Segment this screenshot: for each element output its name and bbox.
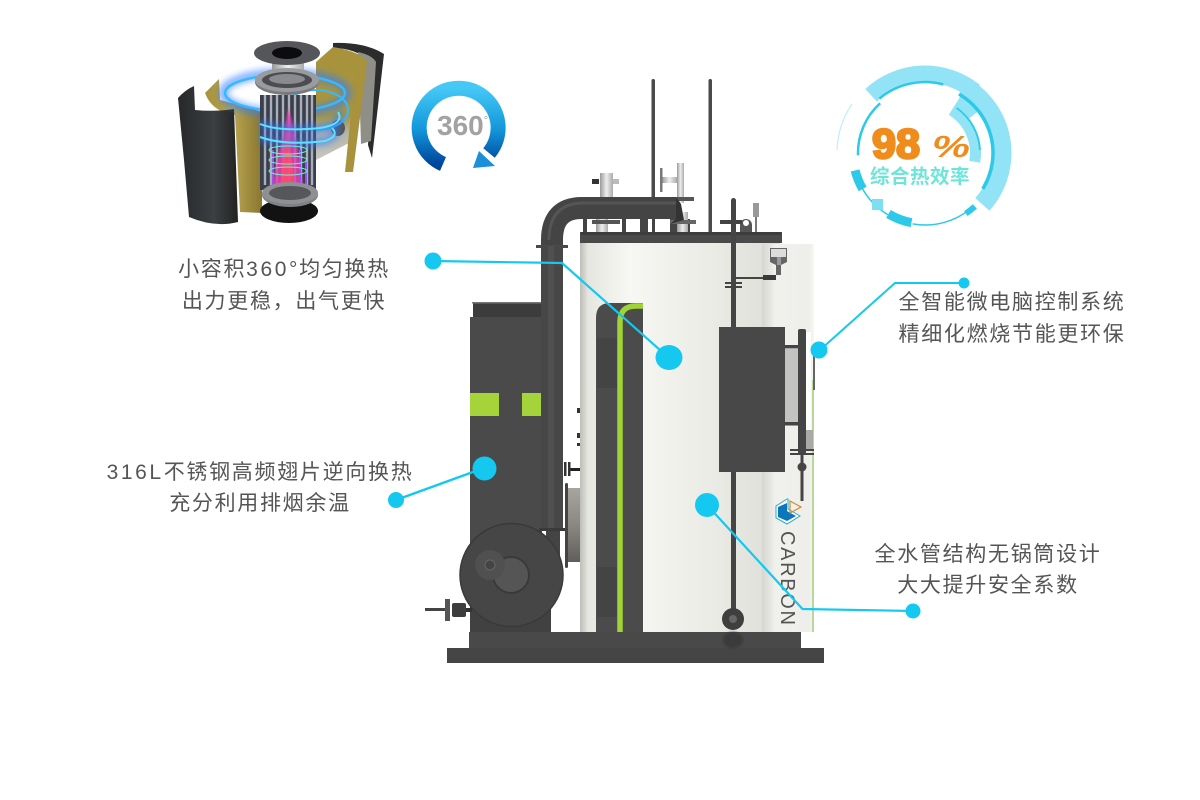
shell hole: [331, 120, 345, 136]
percent sign: %: [932, 129, 970, 164]
vertical flue pipe: [539, 246, 566, 557]
exchanger tube bundle: [260, 95, 316, 190]
text: smart control system: 精细化燃烧节能更环保: [898, 323, 1126, 346]
ring graphics: [813, 41, 1037, 265]
callout 1: [424, 252, 682, 370]
callout lines and dots: [388, 252, 970, 618]
bottom base and ring: [260, 182, 318, 223]
text: 360 heat exchange: 小容积360°均匀换热: [178, 258, 390, 281]
side panel with green stripe: [596, 303, 643, 632]
text: smart control system: 全智能微电脑控制系统: [898, 291, 1126, 314]
top flange and upper ring: [254, 41, 320, 95]
stack: economizer chimney: [470, 302, 542, 632]
back blue swirl ring: [223, 73, 348, 130]
callout 4: [695, 493, 920, 618]
heat exchanger illustration: [178, 41, 384, 224]
right gold shell: [316, 47, 367, 172]
logo: Carbon hexagon: [776, 499, 801, 524]
front blue swirl lines: [260, 112, 340, 175]
right gold shell edge: [345, 56, 367, 172]
control box: [719, 327, 815, 501]
burner: [425, 524, 563, 632]
text: 360 heat exchange: 出力更稳，出气更快: [182, 290, 386, 313]
flame: [272, 108, 306, 187]
boiler illustration: [425, 79, 824, 663]
logo wordmark: CARBON: CARBON: [776, 531, 798, 625]
value: 98: 98: [872, 120, 920, 167]
pipes and rods on top of the boiler: [536, 79, 759, 300]
back shell inner grey strip: [358, 52, 376, 144]
text: 360 heat exchange: [178, 258, 390, 313]
left gold shell: [205, 79, 262, 213]
callout 2: [810, 278, 970, 358]
text: smart control system: [898, 291, 1126, 346]
text: 316L stainless steel fins: 316L不锈钢高频翅片逆向换热: [107, 461, 413, 484]
left black shell: [178, 86, 238, 224]
text: 316L stainless steel fins: 充分利用排烟余温: [169, 492, 351, 515]
icon: 360 degree arrow: [419, 88, 498, 168]
base frame: [447, 632, 824, 663]
burner mount: [564, 408, 588, 568]
water-level piping and flange: [722, 198, 787, 630]
text: full water tube structure: [874, 543, 1102, 597]
caption: 综合热效率: [870, 165, 970, 188]
back right shell: [333, 43, 384, 158]
icon: 360 degree arrow: °: [484, 115, 488, 127]
text: full water tube structure: 大大提升安全系数: [897, 574, 1079, 597]
icon: 360 degree arrow: 360: [437, 110, 484, 141]
text: full water tube structure: 全水管结构无锅筒设计: [874, 543, 1102, 566]
callout 3: [388, 456, 496, 508]
badge: 98% thermal efficiency: [813, 41, 1037, 265]
text: 316L stainless steel fins: [107, 461, 413, 515]
boiler body: [580, 232, 814, 633]
